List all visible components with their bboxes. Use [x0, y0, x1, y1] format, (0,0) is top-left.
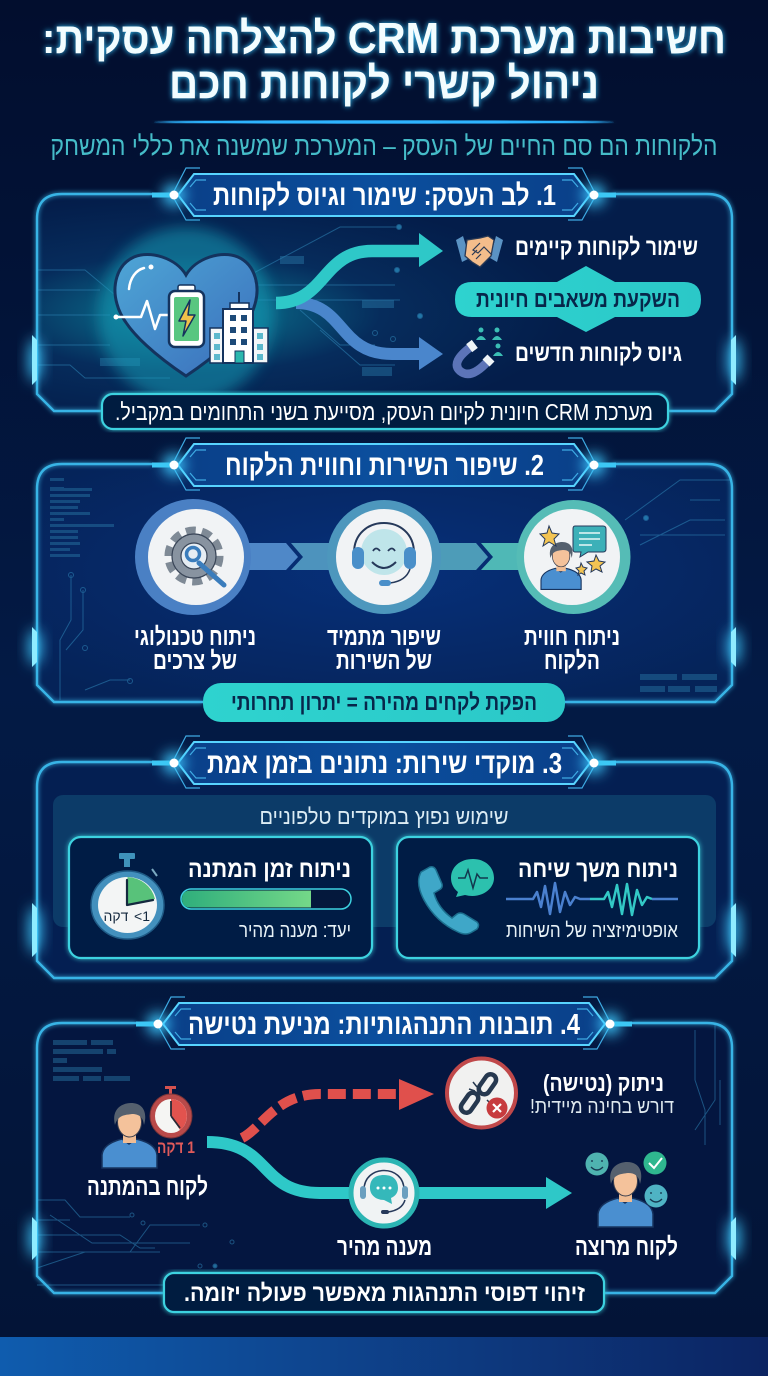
icon: phone with speech bubble: [419, 859, 494, 934]
arrow: to new customers: [296, 303, 443, 370]
card: call duration analysis: אופטימיזציה של השיחות: [506, 920, 678, 942]
icon: handshake: [456, 236, 503, 267]
label: customer experience analysis: הלקוח: [544, 647, 600, 675]
icon: stopwatch: [91, 853, 164, 939]
label: continuous service improvement: [327, 623, 441, 675]
icon: fast response headset: [351, 1160, 417, 1226]
label: customer experience analysis: ניתוח חווית: [524, 623, 620, 651]
label: technology analysis of needs: [134, 623, 256, 675]
chart: sound wave: [506, 883, 678, 915]
card: call duration analysis: [397, 837, 699, 958]
card: wait time analysis: ניתוח זמן המתנה: [188, 856, 351, 883]
label: satisfied customer: לקוח מרוצה: [575, 1233, 678, 1261]
header 4: 4. תובנות התנהגותיות: מניעת נטישה: [188, 1009, 580, 1041]
callout: section 1 summary: מערכת CRM חיונית לקיום העסק, מסייעת בשני התחומים במקביל.: [115, 399, 653, 425]
icon: broken chain: [447, 1058, 516, 1128]
label: disconnection: דורש בחינה מיידית!: [530, 1096, 674, 1118]
frame 3: [29, 762, 740, 978]
step: continuous improvement: [327, 500, 441, 614]
circuit background 1: [37, 224, 422, 378]
callout: rapid learning: הפקת לקחים מהירה = יתרון תחרותי: [231, 689, 537, 715]
label: disconnection: [530, 1070, 674, 1118]
title: ניהול קשרי לקוחות חכם: [169, 59, 599, 108]
frame 4: [29, 1023, 740, 1293]
label: 1 minute: 1 דקה: [157, 1138, 195, 1157]
icon: heart with battery and building: [98, 227, 274, 403]
label: technology analysis of needs: ניתוח טכנולוגי: [134, 623, 256, 651]
arrow: to existing customers: [276, 233, 443, 303]
icon: red stopwatch: [150, 1086, 192, 1138]
callout: vital resource investment: [455, 266, 701, 332]
header 2: 2. שיפור השירות וחווית הלקוח: [225, 450, 544, 482]
header 2: [152, 438, 616, 490]
callout: section 4 summary: [164, 1273, 604, 1312]
label: waiting customer: לקוח בהמתנה: [87, 1173, 208, 1201]
label: disconnection: ניתוק (נטישה): [543, 1070, 664, 1096]
callout: vital resource investment: השקעת משאבים חיונית: [476, 286, 680, 312]
band: common use in call centers: [53, 795, 716, 927]
header 3: 3. מוקדי שירות: נתונים בזמן אמת: [207, 748, 562, 780]
panel: section 4: [29, 997, 740, 1312]
card: call duration analysis: ניתוח משך שיחה: [518, 856, 678, 883]
frame 2: [29, 464, 740, 702]
step: technology analysis: [135, 499, 251, 615]
circuit background 2: [60, 480, 730, 700]
footer band: [0, 1337, 768, 1376]
label: technology analysis of needs: של צרכים: [153, 647, 237, 675]
panel: section 1: [29, 168, 740, 429]
label: continuous service improvement: של השירות: [336, 647, 432, 675]
label: continuous service improvement: שיפור מתמיד: [327, 623, 441, 651]
frame 1: [29, 194, 740, 411]
icon: satisfied customer: [586, 1152, 668, 1227]
title: [42, 14, 726, 108]
callout: section 4 summary: זיהוי דפוסי התנהגות מאפשר פעולה יזומה.: [184, 1280, 585, 1307]
step: customer experience: [516, 500, 630, 614]
callout: rapid learning: [203, 683, 565, 722]
progress bar: [181, 889, 351, 909]
connector arrows: [240, 543, 533, 570]
label: retain existing customers: שימור לקוחות קיימים: [515, 234, 698, 261]
label: fast response: מענה מהיר: [337, 1233, 432, 1261]
arrow: dashed path to churn: [242, 1079, 434, 1138]
icon: waiting customer: [102, 1103, 157, 1168]
title: חשיבות מערכת CRM להצלחה עסקית:: [42, 14, 726, 63]
icon: stopwatch: דקה: [104, 908, 129, 924]
card: wait time analysis: [69, 837, 372, 958]
label: acquire new customers: גיוס לקוחות חדשים: [515, 340, 682, 367]
icon: stopwatch: <1: [134, 908, 150, 924]
header 3: [152, 736, 616, 788]
panel: section 3: [29, 736, 740, 978]
circuit background 4: [37, 1025, 720, 1285]
panel: section 2: [29, 438, 740, 722]
card: wait time analysis: יעד: מענה מהיר: [239, 920, 351, 942]
band: common use in call centers: שימוש נפוץ במוקדים טלפוניים: [260, 804, 508, 829]
header 1: 1. לב העסק: שימור וגיוס לקוחות: [213, 180, 556, 212]
header 4: [136, 997, 632, 1049]
header 1: [152, 168, 616, 220]
icon: magnet attracting customers: [457, 328, 503, 374]
label: customer experience analysis: [524, 623, 620, 675]
arrow: fast path to satisfied customer: [207, 1142, 572, 1209]
